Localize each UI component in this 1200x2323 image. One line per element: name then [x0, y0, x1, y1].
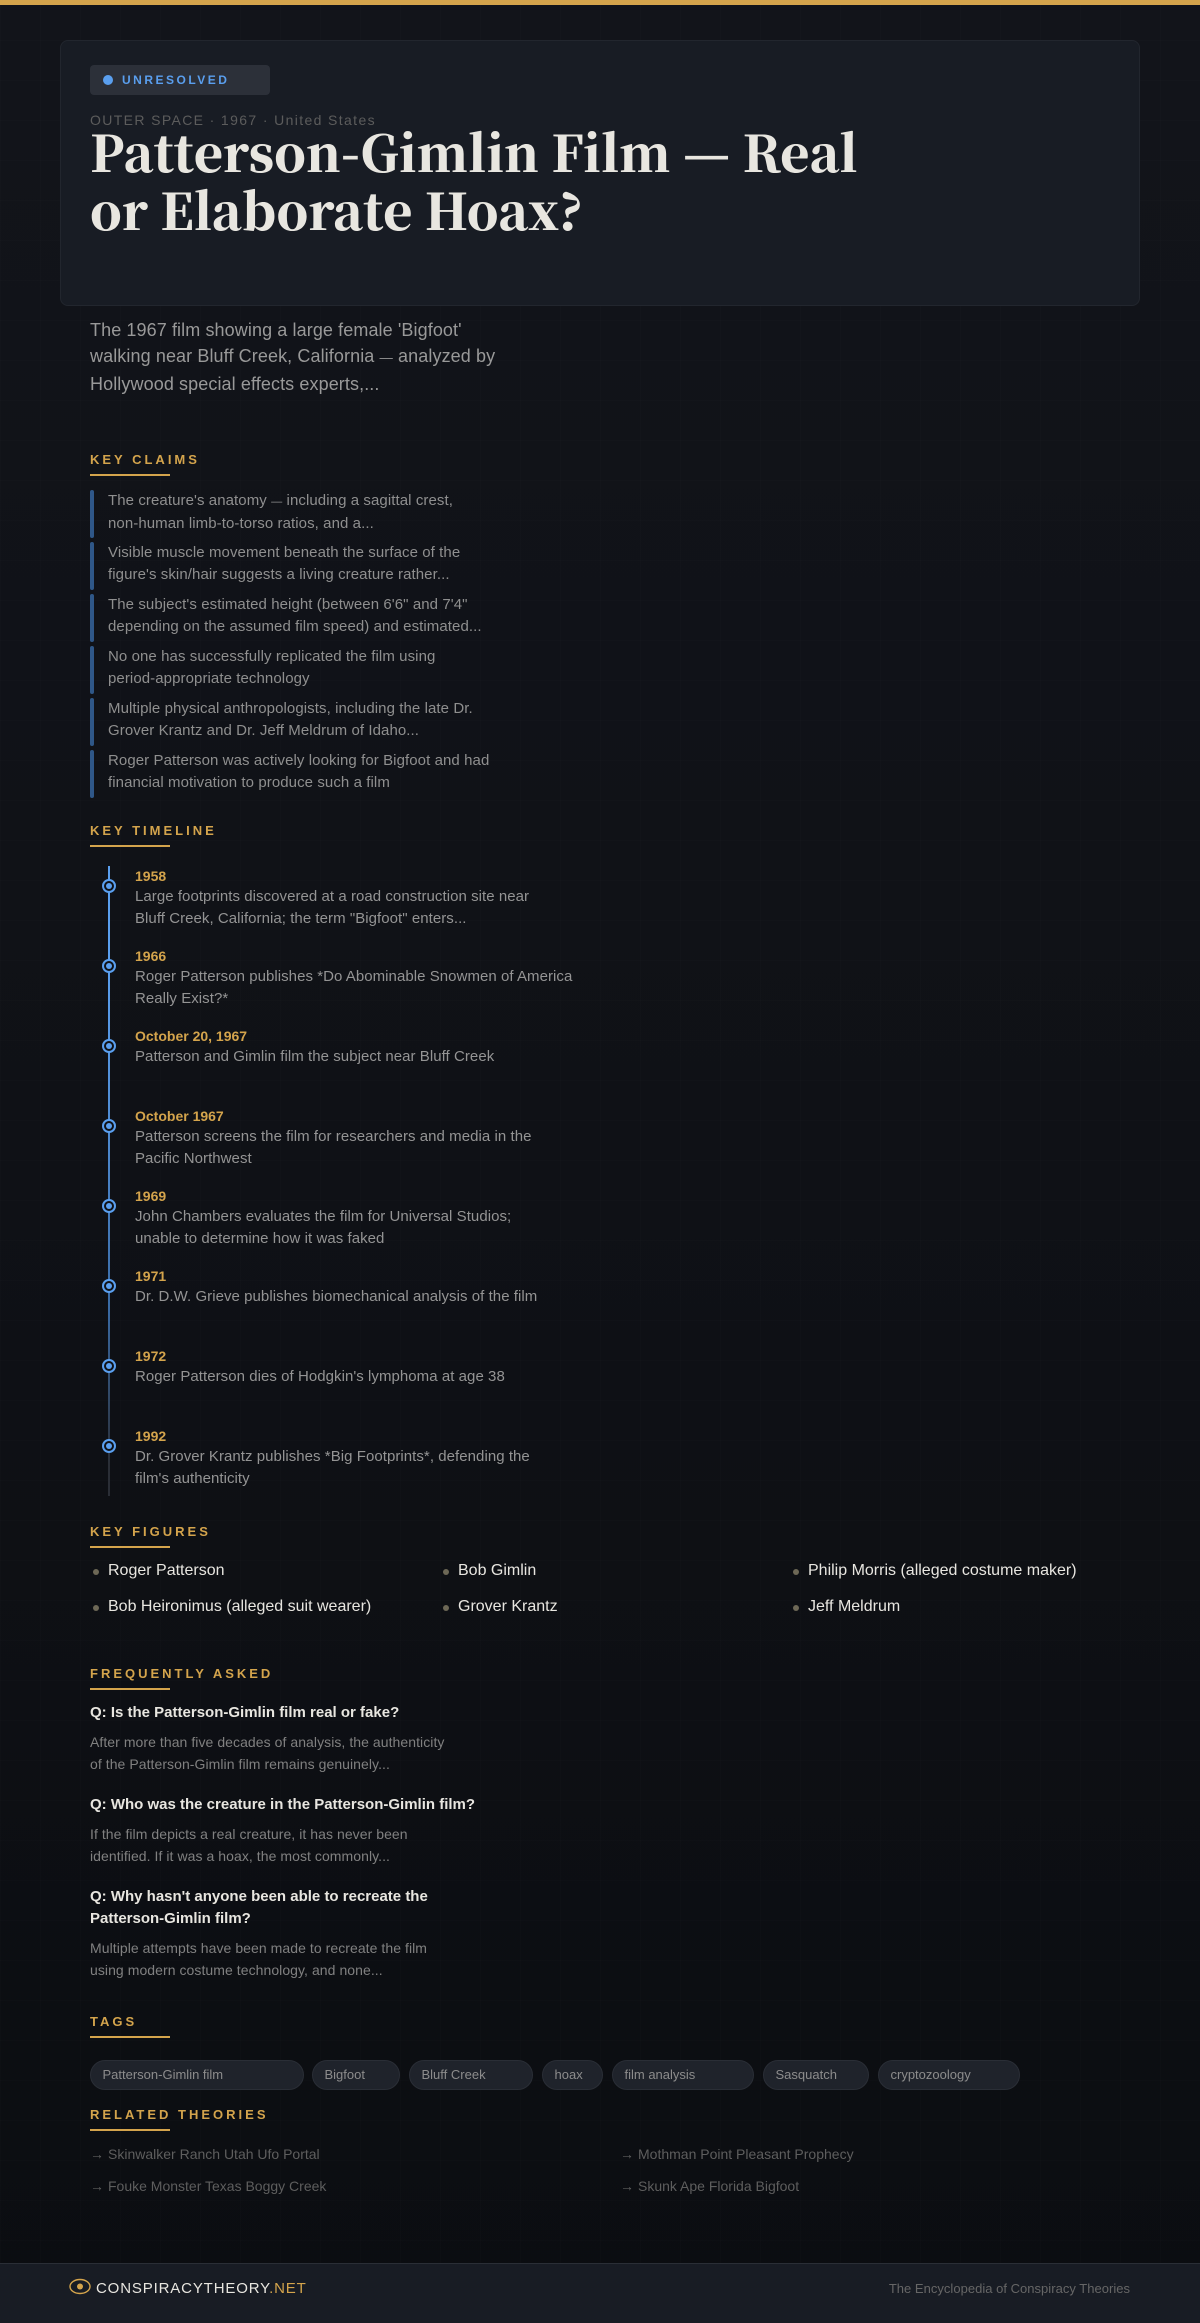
event October 1967: Patterson screens the film for researchers and media in the — [135, 1128, 531, 1145]
figure: Bob Gimlin: Bob Gimlin — [458, 1562, 536, 1579]
FAQ item 1: Q: Is the Patterson-Gimlin film real or fake? — [90, 1704, 399, 1721]
event 1958 — [102, 868, 529, 927]
summary text: Hollywood special effects experts,... — [90, 374, 380, 394]
event October 20, 1967 — [102, 1028, 494, 1065]
tag — [763, 2060, 869, 2090]
claim 6: financial motivation to produce such a film — [108, 774, 390, 791]
event October 20, 1967: October 20, 1967 — [135, 1028, 247, 1044]
event 1992: film's authenticity — [135, 1470, 250, 1487]
event 1992: Dr. Grover Krantz publishes *Big Footprints*, defending the — [135, 1448, 530, 1465]
event 1966: 1966 — [135, 948, 166, 964]
event 1992 — [102, 1428, 530, 1487]
claim 2: figure's skin/hair suggests a living creature rather... — [108, 566, 450, 583]
panel: key figures — [93, 1562, 1077, 1615]
summary text: The 1967 film showing a large female 'Bigfoot' — [90, 320, 462, 340]
panel: hero header — [60, 40, 1140, 306]
related link — [620, 2176, 1020, 2196]
event 1958: Bluff Creek, California; the term "Bigfoot" enters... — [135, 910, 466, 927]
claim 1: non-human limb-to-torso ratios, and a... — [108, 515, 374, 532]
FAQ item 3: using modern costume technology, and none... — [90, 1962, 383, 1978]
claim 5 — [90, 698, 473, 746]
tag — [312, 2060, 400, 2090]
section heading: key timeline: KEY TIMELINE — [90, 823, 217, 838]
status badge: unresolved — [90, 65, 270, 95]
related link: Fouke Monster Texas Boggy Creek — [108, 2178, 326, 2194]
FAQ item 3 — [90, 1888, 428, 1978]
figure: Philip Morris: Philip Morris (alleged costume maker) — [808, 1562, 1077, 1579]
FAQ item 1: After more than five decades of analysis, the authenticity — [90, 1734, 444, 1750]
logo wordmark: CONSPIRACYTHEORY.NET — [96, 2280, 307, 2297]
FAQ item 2: identified. If it was a hoax, the most commonly... — [90, 1848, 390, 1864]
claim 5: Grover Krantz and Dr. Jeff Meldrum of Idaho... — [108, 722, 419, 739]
claim 1 — [90, 490, 453, 538]
FAQ item 3: Multiple attempts have been made to recreate the film — [90, 1940, 427, 1956]
related link: → — [620, 2178, 634, 2194]
FAQ item 2 — [90, 1796, 475, 1864]
tag: Sasquatch — [776, 2067, 837, 2082]
event 1958: Large footprints discovered at a road construction site near — [135, 888, 529, 905]
event 1972: Roger Patterson dies of Hodgkin's lymphoma at age 38 — [135, 1368, 505, 1385]
icon: eye logo — [69, 2278, 91, 2295]
event 1958: 1958 — [135, 868, 166, 884]
event October 1967: October 1967 — [135, 1108, 224, 1124]
claim 1: The creature's anatomy — including a sagittal crest, — [108, 492, 453, 509]
event 1992: 1992 — [135, 1428, 166, 1444]
footer — [0, 2263, 1200, 2323]
related link: → — [620, 2146, 634, 2162]
icon: status dot — [103, 75, 113, 85]
tag — [878, 2060, 1020, 2090]
summary text — [90, 320, 495, 394]
section heading: key claims: KEY CLAIMS — [90, 452, 200, 467]
panel: FAQ — [90, 1704, 475, 1978]
tag — [612, 2060, 754, 2090]
footer tagline: The Encyclopedia of Conspiracy Theories — [889, 2281, 1130, 2296]
title: Patterson-Gimlin Film — Real — [90, 115, 858, 187]
related link: Skunk Ape Florida Bigfoot — [638, 2178, 799, 2194]
event 1972: 1972 — [135, 1348, 166, 1364]
claim 5: Multiple physical anthropologists, including the late Dr. — [108, 700, 473, 717]
related link: → — [90, 2178, 104, 2194]
summary text: walking near Bluff Creek, California — analyzed by — [90, 346, 495, 366]
claim 2 — [90, 542, 460, 590]
claim 3: The subject's estimated height (between 6'6" and 7'4" — [108, 596, 468, 613]
tag: cryptozoology — [890, 2067, 971, 2082]
FAQ item 2: If the film depicts a real creature, it has never been — [90, 1826, 408, 1842]
event 1966 — [102, 948, 572, 1007]
related link: Skinwalker Ranch Utah Ufo Portal — [108, 2146, 320, 2162]
event 1969: John Chambers evaluates the film for Universal Studios; — [135, 1208, 511, 1225]
FAQ item 1: of the Patterson-Gimlin film remains genuinely... — [90, 1756, 390, 1772]
tag: hoax — [554, 2067, 583, 2082]
event 1971: Dr. D.W. Grieve publishes biomechanical analysis of the film — [135, 1288, 537, 1305]
figure: Bob Heironimus: Bob Heironimus (alleged suit wearer) — [108, 1598, 371, 1615]
tag: Bigfoot — [324, 2067, 365, 2082]
panel: timeline — [102, 866, 572, 1496]
tag: Bluff Creek — [422, 2067, 486, 2082]
section heading: tags: TAGS — [90, 2014, 137, 2029]
event 1969 — [102, 1188, 511, 1247]
claim 6: Roger Patterson was actively looking for Bigfoot and had — [108, 752, 489, 769]
event October 1967: Pacific Northwest — [135, 1150, 252, 1167]
related link: Mothman Point Pleasant Prophecy — [638, 2146, 854, 2162]
badge label: UNRESOLVED — [122, 73, 229, 87]
event October 20, 1967: Patterson and Gimlin film the subject near Bluff Creek — [135, 1048, 494, 1065]
claim 2: Visible muscle movement beneath the surface of the — [108, 544, 460, 561]
event October 1967 — [102, 1108, 531, 1167]
tag: Patterson-Gimlin film — [102, 2067, 223, 2082]
event 1971 — [102, 1268, 537, 1305]
claim 4: No one has successfully replicated the film using — [108, 648, 435, 665]
tag — [542, 2060, 603, 2090]
title: or Elaborate Hoax? — [90, 173, 583, 245]
timeline axis — [108, 866, 110, 1496]
related link: → — [90, 2146, 104, 2162]
event 1966: Really Exist?* — [135, 990, 228, 1007]
panel: related theories — [90, 2146, 854, 2194]
FAQ item 3: Q: Why hasn't anyone been able to recreate the — [90, 1888, 428, 1905]
top accent bar — [0, 0, 1200, 5]
FAQ item 3: Patterson-Gimlin film? — [90, 1910, 251, 1927]
section heading: frequently asked: FREQUENTLY ASKED — [90, 1666, 273, 1681]
meta line: OUTER SPACE · 1967 · United States — [90, 112, 376, 128]
claim 3: depending on the assumed film speed) and estimated... — [108, 618, 482, 635]
panel: key claims list — [90, 490, 489, 798]
FAQ item 2: Q: Who was the creature in the Patterson-Gimlin film? — [90, 1796, 475, 1813]
tag — [90, 2060, 304, 2090]
section heading: related theories: RELATED THEORIES — [90, 2107, 268, 2122]
tag — [409, 2060, 533, 2090]
FAQ item 1 — [90, 1704, 444, 1772]
event 1971: 1971 — [135, 1268, 166, 1284]
claim 4 — [90, 646, 435, 694]
figure: Roger Patterson: Roger Patterson — [108, 1562, 225, 1579]
tag: film analysis — [624, 2067, 695, 2082]
claim 6 — [90, 750, 489, 798]
figure: Grover Krantz: Grover Krantz — [458, 1598, 558, 1615]
title — [90, 115, 858, 245]
section heading: key figures: KEY FIGURES — [90, 1524, 211, 1539]
claim 4: period-appropriate technology — [108, 670, 310, 687]
event 1969: 1969 — [135, 1188, 166, 1204]
panel: tags — [90, 2060, 1020, 2090]
event 1969: unable to determine how it was faked — [135, 1230, 384, 1247]
event 1966: Roger Patterson publishes *Do Abominable Snowmen of America — [135, 968, 572, 985]
event 1972 — [102, 1348, 505, 1385]
figure: Jeff Meldrum: Jeff Meldrum — [808, 1598, 900, 1615]
claim 3 — [90, 594, 482, 642]
